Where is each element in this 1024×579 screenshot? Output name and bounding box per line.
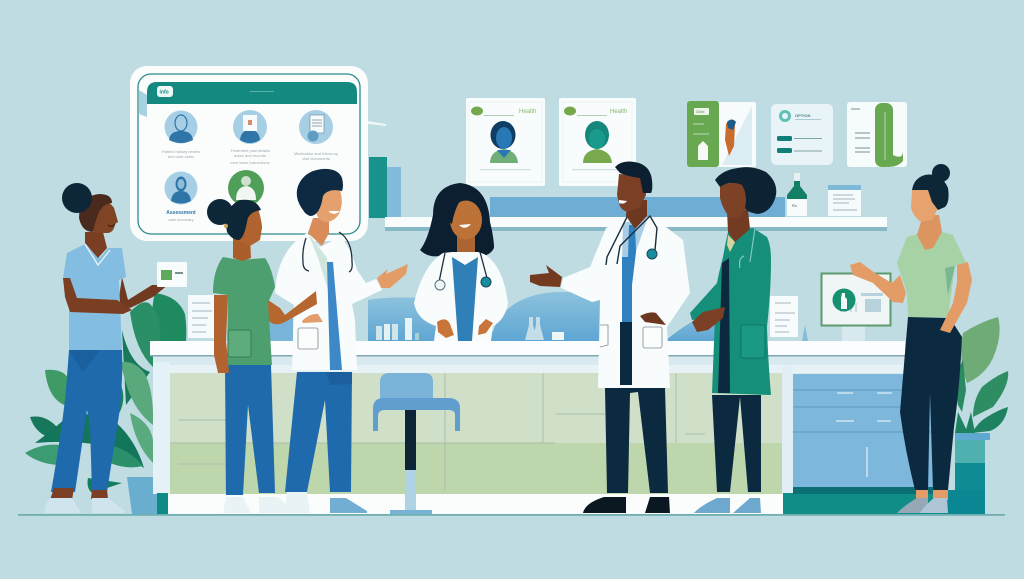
blue box on counter	[268, 317, 293, 341]
collar	[727, 235, 735, 252]
scrub	[452, 257, 478, 341]
icon: clinician on green	[228, 170, 264, 206]
hair	[226, 200, 261, 240]
document on shelf	[828, 185, 861, 216]
head	[316, 190, 342, 222]
pocket	[741, 325, 765, 358]
caption 3: Medication and follow-up	[294, 151, 339, 156]
paper on counter left	[188, 295, 215, 338]
shirt	[897, 232, 966, 317]
stethoscope	[740, 228, 755, 268]
shoes	[223, 497, 293, 513]
person: doctor with long hair behind counter	[414, 183, 508, 341]
left leg	[153, 362, 170, 494]
hand at pocket	[640, 312, 666, 325]
shirt	[63, 244, 126, 350]
head	[450, 200, 482, 240]
hair	[420, 183, 494, 256]
hip arm	[940, 262, 972, 333]
pot: right	[945, 433, 990, 514]
poster: green avatar	[559, 98, 636, 186]
person: doctor with curly hair	[275, 169, 408, 513]
back arm	[118, 277, 168, 308]
board header: info	[160, 90, 169, 96]
back arm	[266, 291, 317, 324]
pocket	[228, 330, 251, 357]
floor line	[18, 514, 1005, 516]
person: clinician in teal coat	[690, 167, 776, 513]
person: woman in green shirt	[850, 164, 972, 513]
icon: person 4	[164, 172, 198, 204]
head	[720, 180, 748, 218]
counter	[150, 341, 948, 514]
legs	[900, 317, 962, 490]
legs	[225, 365, 275, 495]
counter underside	[153, 355, 905, 374]
hand on coat	[302, 314, 323, 323]
hair	[912, 175, 949, 210]
neck	[626, 200, 647, 229]
card: green brochure	[687, 101, 756, 167]
counter top	[150, 341, 905, 356]
gesturing hand	[377, 264, 408, 288]
card: chart strip	[847, 102, 907, 167]
poster: blue avatar: Health	[519, 109, 536, 115]
right pillar	[782, 366, 793, 494]
icon: document	[299, 110, 333, 144]
panel: patient information board	[130, 66, 368, 241]
bottle on shelf: Rx	[792, 203, 797, 208]
legs	[51, 350, 122, 492]
floor base	[168, 494, 783, 514]
hair	[715, 167, 776, 214]
caption 4: Assessment	[166, 210, 196, 216]
card: options: OPTION	[795, 113, 810, 118]
shirt	[213, 257, 275, 365]
forward arm	[850, 262, 906, 303]
green cabinets	[170, 373, 782, 494]
panel: patient information board: notes and records	[234, 153, 266, 158]
wall cabinet	[368, 121, 401, 218]
bun	[62, 183, 92, 213]
shoes	[897, 498, 928, 513]
hair	[297, 169, 343, 216]
head	[617, 174, 646, 212]
shelf	[385, 217, 887, 231]
legs	[712, 395, 761, 492]
small green card in hand	[157, 262, 187, 287]
hair	[79, 194, 112, 232]
panel: patient information board: care summary	[168, 217, 194, 222]
board header	[147, 82, 357, 104]
caption 1: Patient history review	[162, 149, 200, 154]
blue band behind upper shelf	[490, 197, 785, 217]
person: left nurse in light blue	[45, 183, 168, 513]
hands	[437, 319, 493, 338]
card: options	[771, 104, 833, 165]
pot: left	[127, 477, 157, 514]
person: male doctor	[530, 162, 690, 513]
person: nurse in green	[207, 199, 317, 513]
bun	[207, 199, 233, 225]
coat	[414, 252, 508, 341]
pockets	[643, 327, 662, 348]
coat	[275, 233, 382, 370]
neck	[85, 232, 107, 258]
neck	[233, 238, 251, 261]
monitor	[822, 274, 890, 341]
bottle on shelf	[787, 173, 807, 216]
gesturing hand	[530, 265, 562, 287]
shoes	[45, 498, 125, 513]
bun	[932, 164, 950, 182]
shoes	[694, 498, 761, 513]
plant: right	[955, 317, 1008, 433]
neck	[457, 236, 475, 258]
neck	[727, 210, 750, 242]
teal plinth left	[157, 493, 168, 514]
hair	[615, 162, 652, 193]
panel: patient information board: visit documents	[302, 156, 330, 161]
teal plinth right	[783, 493, 948, 514]
shirt and tie	[622, 217, 648, 257]
wall blue wave behind the counter	[368, 292, 716, 341]
dark scrub	[718, 258, 730, 393]
panel: patient information board: and care notes	[168, 154, 194, 159]
coat	[561, 218, 690, 388]
card: green brochure: Clinic	[696, 110, 705, 114]
caption 2: Treatment plan details	[230, 148, 270, 153]
shoes	[583, 497, 670, 513]
neck	[308, 218, 329, 246]
back leaves	[152, 293, 186, 342]
poster: blue avatar	[466, 98, 545, 186]
panel: patient information board: care team instructions	[230, 160, 270, 165]
stethoscope	[435, 252, 491, 290]
plant: left	[25, 293, 186, 493]
head	[238, 208, 262, 246]
icon: person 1	[164, 110, 198, 144]
stethoscope	[303, 232, 352, 272]
stethoscope	[606, 216, 657, 265]
icon: person with document	[233, 110, 267, 144]
head	[911, 190, 938, 222]
paper on counter right	[770, 296, 808, 341]
front arm	[63, 278, 132, 314]
legs	[285, 372, 352, 492]
blue cabinets	[793, 374, 943, 487]
hand	[692, 307, 725, 332]
neck	[917, 215, 942, 250]
scrub	[308, 233, 328, 290]
pockets	[298, 328, 318, 349]
front arm	[214, 295, 229, 373]
stool	[373, 373, 460, 515]
legs	[605, 388, 668, 493]
poster: green avatar: Health	[610, 109, 627, 115]
coat	[690, 228, 771, 395]
head	[90, 201, 118, 233]
flasks	[525, 317, 564, 340]
shoes	[285, 492, 310, 513]
medicine bottles	[376, 318, 419, 340]
